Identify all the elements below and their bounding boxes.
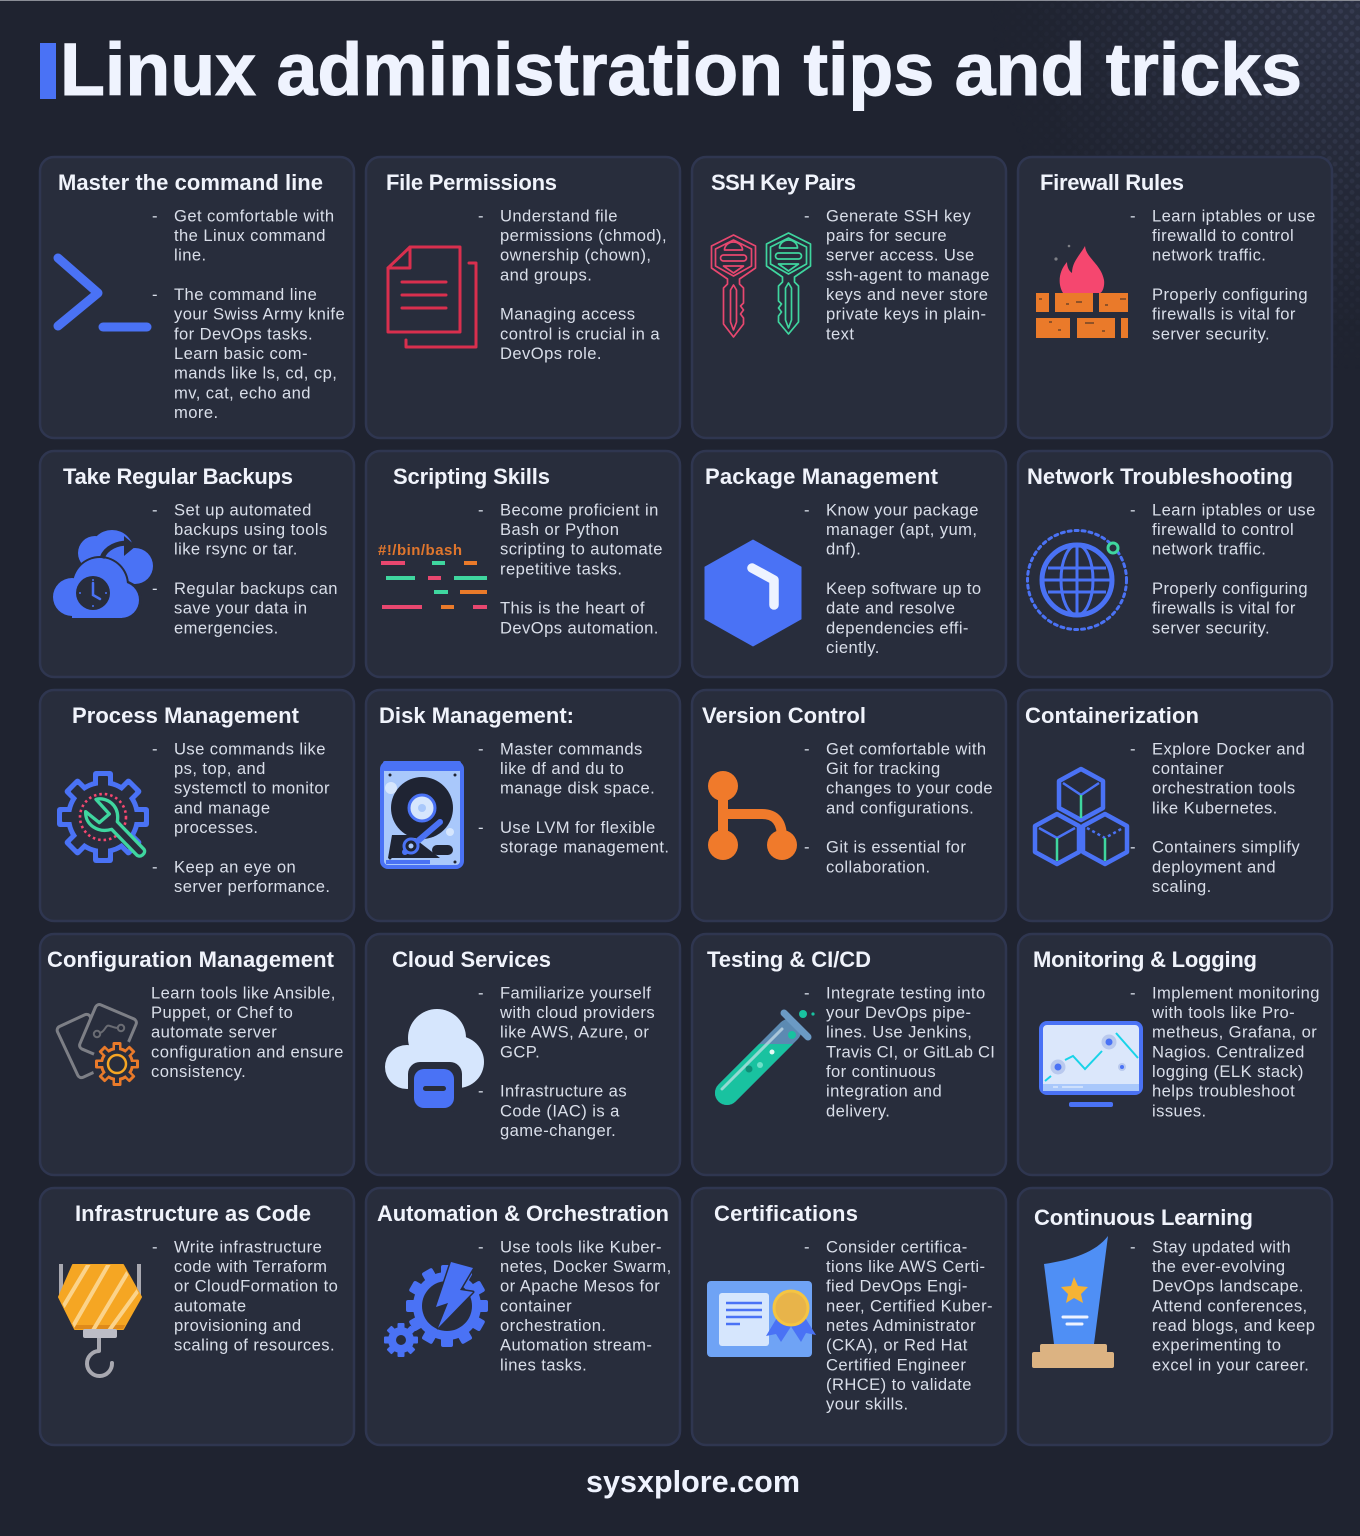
text block: - [1130, 983, 1136, 1002]
text block: Implement monitoring [1152, 983, 1320, 1002]
text block: - [478, 739, 484, 758]
text block: manager (apt, yum, [826, 520, 977, 539]
text block: Write infrastructure [174, 1237, 322, 1256]
text block: - [478, 983, 484, 1002]
text block: Infrastructure as [500, 1082, 627, 1101]
text block: Become proficient in [500, 500, 659, 519]
icon: red key [712, 235, 756, 337]
text block: - [478, 500, 484, 519]
panel: Testing & CI/CD [692, 934, 1006, 1175]
text block: Consider certifica- [826, 1237, 968, 1256]
text block: delivery. [826, 1101, 890, 1120]
text block: - [1130, 838, 1136, 857]
heading: Network Troubleshooting [1027, 464, 1293, 489]
text block: DevOps role. [500, 344, 602, 363]
text block: server security. [1152, 324, 1270, 343]
text block: scripting to automate [500, 540, 663, 559]
text block: Get comfortable with [174, 206, 335, 225]
panel: Network Troubleshooting [1018, 451, 1332, 677]
text block: Integrate testing into [826, 983, 986, 1002]
text block: firewalld to control [1152, 520, 1294, 539]
text block: Regular backups can [174, 579, 338, 598]
text block: lines. Use Jenkins, [826, 1023, 972, 1042]
panel: Monitoring & Logging [1018, 934, 1332, 1175]
text block: Familiarize yourself [500, 983, 651, 1002]
icon: git branch [708, 771, 797, 860]
icon: green key [766, 233, 810, 334]
text block: Generate SSH key [826, 206, 971, 225]
text block: like rsync or tar. [174, 540, 298, 559]
text block: read blogs, and keep [1152, 1316, 1315, 1335]
text block: storage management. [500, 838, 669, 857]
panel: Master the command line [40, 157, 354, 438]
icon: package hexagon [705, 540, 801, 646]
text block: like AWS, Azure, or [500, 1023, 649, 1042]
text block: Git for tracking [826, 759, 941, 778]
icon: gears and lightning [384, 1262, 488, 1357]
text block: private keys in plain- [826, 305, 986, 324]
text block: Get comfortable with [826, 739, 987, 758]
heading: Process Management [72, 703, 300, 728]
text block: Know your package [826, 500, 979, 519]
icon: document [388, 247, 476, 347]
text block: container [500, 1296, 572, 1315]
panel: Certifications [692, 1188, 1006, 1445]
text block: container [1152, 759, 1224, 778]
text block: Automation stream- [500, 1336, 652, 1355]
icon: monitor chart [1041, 1023, 1141, 1107]
text block: Certified Engineer [826, 1355, 966, 1374]
text block: emergencies. [174, 618, 279, 637]
heading: Package Management [705, 464, 939, 489]
heading: Certifications [714, 1201, 858, 1226]
icon: bash script: #!/bin/bash [378, 542, 462, 559]
heading: Master the command line [58, 170, 323, 195]
panel: Firewall Rules [1018, 157, 1332, 438]
icon: container cubes [1035, 769, 1127, 864]
icon: crane hook [55, 1262, 145, 1376]
text block: integration and [826, 1082, 942, 1101]
text block: provisioning and [174, 1316, 302, 1335]
text block: - [804, 739, 810, 758]
text block: Master commands [500, 739, 643, 758]
text block: game-changer. [500, 1121, 616, 1140]
text block: firewalls is vital for [1152, 599, 1296, 618]
text block: control is crucial in a [500, 324, 660, 343]
panel: Continuous Learning [1018, 1188, 1332, 1445]
heading: Take Regular Backups [63, 464, 293, 489]
text block: your skills. [826, 1395, 908, 1414]
text block: and groups. [500, 265, 592, 284]
text block: ownership (chown), [500, 246, 651, 265]
text block: Puppet, or Chef to [151, 1003, 293, 1022]
heading: Continuous Learning [1034, 1205, 1253, 1230]
text block: Containers simplify [1152, 838, 1300, 857]
text block: changes to your code [826, 779, 993, 798]
text block: Attend conferences, [1152, 1296, 1308, 1315]
heading: Infrastructure as Code [75, 1201, 311, 1226]
text block: automate [174, 1296, 247, 1315]
text block: neer, Certified Kuber- [826, 1296, 993, 1315]
text block: - [152, 206, 158, 225]
heading: Configuration Management [47, 947, 335, 972]
text block: - [804, 206, 810, 225]
text block: Use commands like [174, 739, 326, 758]
text block: excel in your career. [1152, 1355, 1309, 1374]
text block: - [1130, 500, 1136, 519]
text block: firewalld to control [1152, 226, 1294, 245]
text block: Managing access [500, 305, 635, 324]
text block: ssh-agent to manage [826, 265, 990, 284]
text block: more. [174, 403, 219, 422]
icon: firewall [1036, 245, 1128, 338]
text block: - [478, 818, 484, 837]
title: Linux administration tips and tricks [60, 28, 1302, 111]
text block: Properly configuring [1152, 579, 1308, 598]
icon: terminal prompt [58, 258, 147, 327]
text block: your DevOps pipe- [826, 1003, 971, 1022]
heading: Containerization [1025, 703, 1199, 728]
text block: Use LVM for flexible [500, 818, 656, 837]
text block: for continuous [826, 1062, 936, 1081]
heading: Automation & Orchestration [377, 1201, 669, 1226]
text block: - [804, 1237, 810, 1256]
text block: Code (IAC) is a [500, 1101, 620, 1120]
text block: dependencies effi- [826, 618, 969, 637]
text block: save your data in [174, 599, 308, 618]
text block: Bash or Python [500, 520, 619, 539]
panel: Process Management [40, 690, 354, 921]
text block: Learn basic com- [174, 344, 308, 363]
text block: Set up automated [174, 500, 312, 519]
text block: network traffic. [1152, 246, 1266, 265]
panel: Version Control [692, 690, 1006, 921]
heading: Firewall Rules [1040, 170, 1184, 195]
text block: orchestration tools [1152, 779, 1296, 798]
text block: netes, Docker Swarm, [500, 1257, 672, 1276]
icon: cloud storage [385, 1009, 484, 1112]
text block: experimenting to [1152, 1336, 1281, 1355]
text block: logging (ELK stack) [1152, 1062, 1304, 1081]
panel: Disk Management [366, 690, 680, 921]
heading: Cloud Services [392, 947, 551, 972]
text block: GCP. [500, 1042, 540, 1061]
text block: for DevOps tasks. [174, 324, 313, 343]
text block: ciently. [826, 638, 880, 657]
text block: Keep an eye on [174, 857, 296, 876]
panel: Automation & Orchestration [366, 1188, 680, 1445]
text block: the ever-evolving [1152, 1257, 1286, 1276]
icon: hard disk [382, 761, 462, 867]
text block: netes Administrator [826, 1316, 976, 1335]
text block: the Linux command [174, 226, 326, 245]
text block: (CKA), or Red Hat [826, 1336, 968, 1355]
text block: (RHCE) to validate [826, 1375, 972, 1394]
heading: Testing & CI/CD [707, 947, 871, 972]
panel: Containerization [1018, 690, 1332, 921]
text block: text [826, 324, 854, 343]
heading: Disk Management: [379, 703, 574, 728]
text block: and configurations. [826, 798, 974, 817]
text block: server performance. [174, 877, 330, 896]
text block: - [152, 500, 158, 519]
heading: Scripting Skills [393, 464, 550, 489]
text block: automate server [151, 1023, 277, 1042]
text block: Understand file [500, 206, 618, 225]
text block: network traffic. [1152, 540, 1266, 559]
text block: ps, top, and [174, 759, 266, 778]
text block: like Kubernetes. [1152, 798, 1278, 817]
text block: Learn tools like Ansible, [151, 983, 336, 1002]
panel: Scripting Skills [366, 451, 680, 677]
text block: server security. [1152, 618, 1270, 637]
text block: DevOps landscape. [1152, 1277, 1304, 1296]
icon: test tube [715, 1010, 815, 1105]
text block: - [152, 739, 158, 758]
text block: like df and du to [500, 759, 624, 778]
text block: - [804, 500, 810, 519]
text block: - [478, 1082, 484, 1101]
text block: date and resolve [826, 599, 955, 618]
text block: - [804, 983, 810, 1002]
icon: bash script [378, 542, 487, 609]
heading: Version Control [702, 703, 866, 728]
text block: Use tools like Kuber- [500, 1237, 662, 1256]
panel: Cloud Services [366, 934, 680, 1175]
panel: Configuration Management [40, 934, 354, 1175]
text block: DevOps automation. [500, 618, 659, 637]
icon: cloud backup [51, 530, 153, 620]
text block: helps troubleshoot [1152, 1082, 1295, 1101]
text block: or CloudFormation to [174, 1277, 338, 1296]
heading: SSH Key Pairs [711, 170, 856, 195]
text block: repetitive tasks. [500, 559, 622, 578]
panel: SSH Key Pairs [692, 157, 1006, 438]
icon: config cards and gear [56, 1003, 142, 1089]
panel: Infrastructure as Code [40, 1188, 354, 1445]
text block: Git is essential for [826, 838, 966, 857]
text block: backups using tools [174, 520, 328, 539]
text block: consistency. [151, 1062, 246, 1081]
text block: dnf). [826, 540, 861, 559]
text block: - [152, 1237, 158, 1256]
text block: scaling. [1152, 877, 1212, 896]
text block: mands like ls, cd, cp, [174, 364, 337, 383]
panel: File Permissions [366, 157, 680, 438]
text block: collaboration. [826, 857, 931, 876]
text block: Learn iptables or use [1152, 206, 1316, 225]
text block: manage disk space. [500, 779, 655, 798]
text block: fied DevOps Engi- [826, 1277, 968, 1296]
text block: systemctl to monitor [174, 779, 330, 798]
text block: metheus, Grafana, or [1152, 1023, 1317, 1042]
text block: configuration and ensure [151, 1042, 344, 1061]
text block: and manage [174, 798, 270, 817]
heading: File Permissions [386, 170, 557, 195]
text block: - [478, 1237, 484, 1256]
text block: deployment and [1152, 857, 1276, 876]
icon: certificate [707, 1281, 816, 1357]
text block: tions like AWS Certi- [826, 1257, 985, 1276]
text block: - [152, 857, 158, 876]
text block: The command line [174, 285, 317, 304]
text block: Learn iptables or use [1152, 500, 1316, 519]
icon: gear and wrench [57, 771, 149, 863]
text block: - [478, 206, 484, 225]
text block: pairs for secure [826, 226, 947, 245]
text block: firewalls is vital for [1152, 305, 1296, 324]
text block: Explore Docker and [1152, 739, 1305, 758]
text block: scaling of resources. [174, 1336, 335, 1355]
text block: Travis CI, or GitLab CI [826, 1042, 995, 1061]
panel: Take Regular Backups [40, 451, 354, 677]
text block: keys and never store [826, 285, 988, 304]
text block: Nagios. Centralized [1152, 1042, 1305, 1061]
icon: trophy [1032, 1236, 1114, 1368]
text block: with tools like Pro- [1151, 1003, 1295, 1022]
text block: code with Terraform [174, 1257, 327, 1276]
text block: - [1130, 739, 1136, 758]
footer: sysxplore.com [586, 1464, 800, 1499]
text block: - [152, 579, 158, 598]
heading: Monitoring & Logging [1033, 947, 1257, 972]
text block: - [804, 838, 810, 857]
text block: server access. Use [826, 246, 975, 265]
text block: with cloud providers [499, 1003, 655, 1022]
text block: issues. [1152, 1101, 1207, 1120]
text block: Stay updated with [1152, 1237, 1291, 1256]
text block: - [1130, 1237, 1136, 1256]
text block: permissions (chmod), [500, 226, 667, 245]
text block: processes. [174, 818, 258, 837]
text block: Properly configuring [1152, 285, 1308, 304]
text block: Keep software up to [826, 579, 982, 598]
text block: mv, cat, echo and [174, 383, 311, 402]
text block: or Apache Mesos for [500, 1277, 660, 1296]
panel: Package Management [692, 451, 1006, 677]
text block: This is the heart of [500, 599, 645, 618]
icon: globe [1028, 530, 1126, 630]
text block: lines tasks. [500, 1355, 587, 1374]
text block: your Swiss Army knife [174, 305, 345, 324]
text block: orchestration. [500, 1316, 606, 1335]
text block: - [1130, 206, 1136, 225]
text block: line. [174, 246, 207, 265]
text block: - [152, 285, 158, 304]
